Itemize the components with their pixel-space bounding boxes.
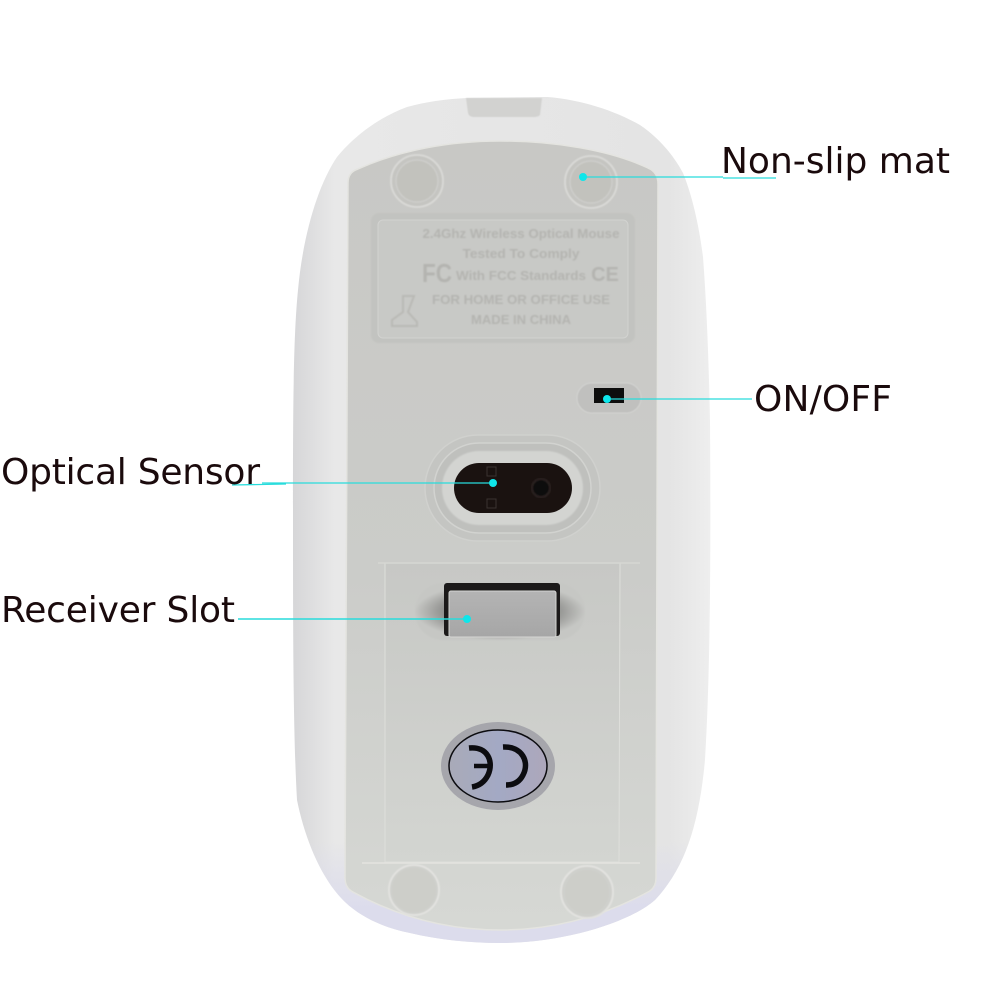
- callout: on/off switch: [603, 379, 892, 420]
- regulatory label plate: 2.4Ghz Wireless Optical Mouse: [422, 226, 620, 241]
- regulatory label plate: FOR HOME OR OFFICE USE: [432, 292, 610, 307]
- mouse body shell: [293, 97, 710, 943]
- callout: optical sensor: [1, 452, 497, 493]
- regulatory label plate: Tested To Comply: [462, 246, 580, 261]
- callout: on/off switch: ON/OFF: [754, 379, 892, 420]
- callout: non-slip mat: [579, 141, 950, 182]
- optical sensor window: [425, 435, 600, 541]
- rubber foot: top left: [391, 155, 443, 207]
- top tab: [466, 98, 542, 117]
- regulatory label plate: [371, 213, 635, 343]
- regulatory label plate: CE: [591, 264, 619, 286]
- mouse underside: [293, 97, 710, 943]
- callout: receiver slot: Receiver Slot: [1, 590, 235, 631]
- regulatory label plate: FC: [422, 258, 452, 288]
- EC badge: [441, 722, 555, 810]
- body lower shading: [293, 97, 710, 943]
- receiver slot: [415, 583, 585, 640]
- rubber foot: bottom left: [389, 865, 439, 915]
- rubber foot: top right: [565, 156, 617, 208]
- power switch: [577, 383, 641, 413]
- regulatory label plate: MADE IN CHINA: [471, 312, 572, 327]
- callout: optical sensor: Optical Sensor: [1, 452, 260, 493]
- base plate: [345, 141, 658, 930]
- regulatory label plate: With FCC Standards: [456, 268, 586, 283]
- battery door: [362, 563, 640, 863]
- rubber foot: bottom right: [561, 866, 613, 918]
- callout: non-slip mat: Non-slip mat: [721, 141, 950, 182]
- callout: receiver slot: [1, 590, 471, 631]
